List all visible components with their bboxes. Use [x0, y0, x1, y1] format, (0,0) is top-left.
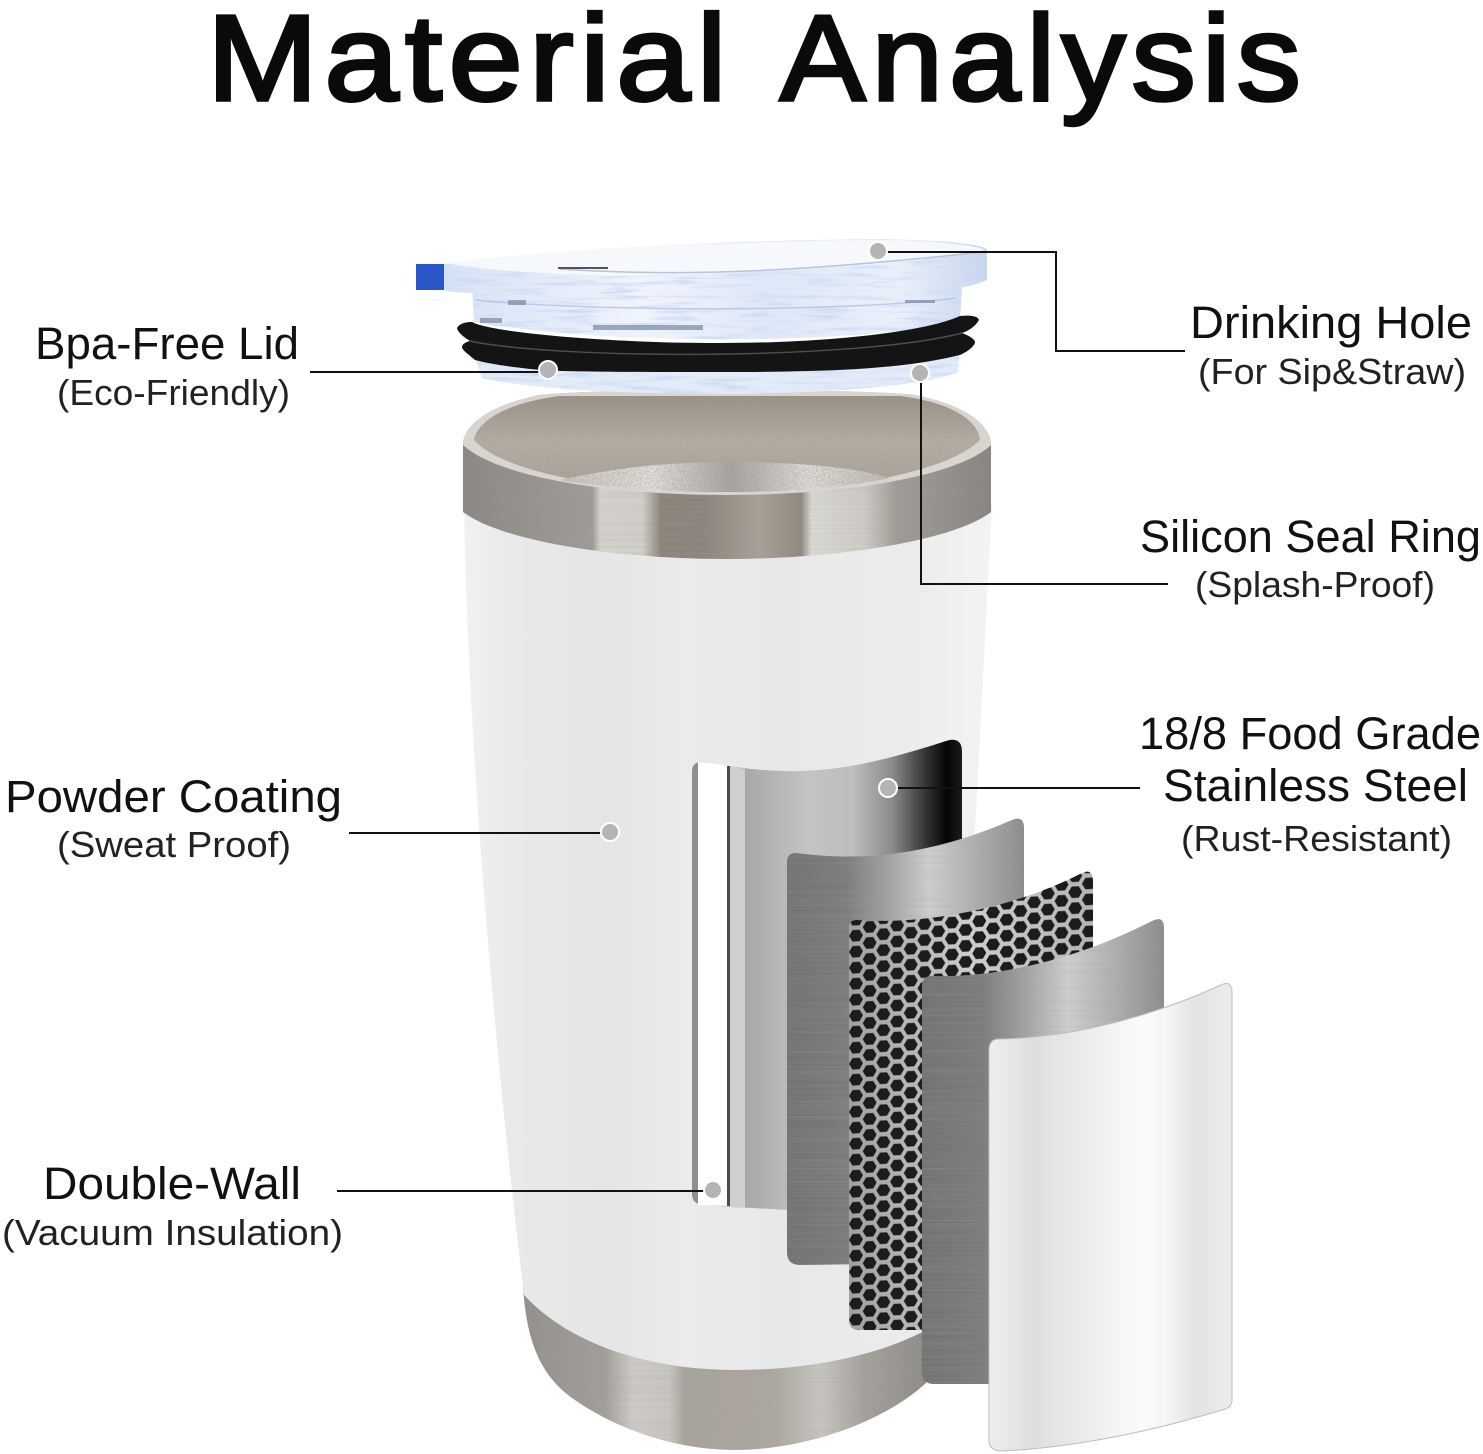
inner wall strip — [730, 766, 745, 1208]
exploded layer: powder coating — [989, 984, 1232, 1451]
exploded layer: steel wall — [787, 819, 1024, 1265]
callout: stainless steel: Stainless Steel — [1163, 760, 1468, 811]
callout: double-wall: Double-Wall — [43, 1158, 301, 1209]
transparent lid — [416, 239, 987, 394]
lid body — [472, 285, 962, 339]
callout: silicon seal ring: (Splash-Proof) — [1195, 564, 1435, 605]
callout: stainless steel: 18/8 Food Grade — [1139, 708, 1481, 759]
callout: powder coating: Powder Coating — [5, 771, 342, 822]
rim lip — [463, 390, 991, 495]
lower lid plug — [472, 345, 960, 394]
callout: powder coating — [5, 771, 619, 865]
blue pull tab — [416, 264, 444, 290]
callout: double-wall — [2, 1158, 722, 1253]
callout: drinking hole: (For Sip&Straw) — [1198, 351, 1466, 392]
black seal ring — [457, 316, 979, 372]
exploded layer: honeycomb insulation — [849, 872, 1093, 1330]
outer wall strip — [692, 762, 702, 1205]
callout: stainless steel — [879, 708, 1481, 859]
callout: powder coating: (Sweat Proof) — [57, 824, 291, 865]
cutaway window — [692, 740, 962, 1240]
callout: bpa-free lid: Bpa-Free Lid — [35, 318, 299, 369]
lid top surface — [446, 240, 985, 275]
cup interior — [474, 396, 980, 492]
steel rim ring — [463, 390, 991, 559]
cup floor highlight — [560, 462, 890, 492]
exploded layer: steel wall two — [922, 919, 1164, 1384]
callout: double-wall: (Vacuum Insulation) — [2, 1212, 343, 1253]
tumbler — [463, 390, 992, 1450]
callout: drinking hole: Drinking Hole — [1190, 297, 1472, 348]
callout: bpa-free lid: (Eco-Friendly) — [57, 372, 290, 413]
steel base — [523, 1285, 926, 1450]
lid outer band — [444, 239, 987, 293]
callout: stainless steel: (Rust-Resistant) — [1181, 818, 1452, 859]
title — [207, 0, 1307, 126]
callout: silicon seal ring: Silicon Seal Ring — [1140, 511, 1481, 562]
powder coated body — [464, 505, 992, 1370]
vacuum gap — [698, 762, 727, 1206]
callout: drinking hole — [869, 242, 1472, 392]
callout: silicon seal ring — [911, 364, 1481, 605]
callout: bpa-free lid — [35, 318, 557, 413]
